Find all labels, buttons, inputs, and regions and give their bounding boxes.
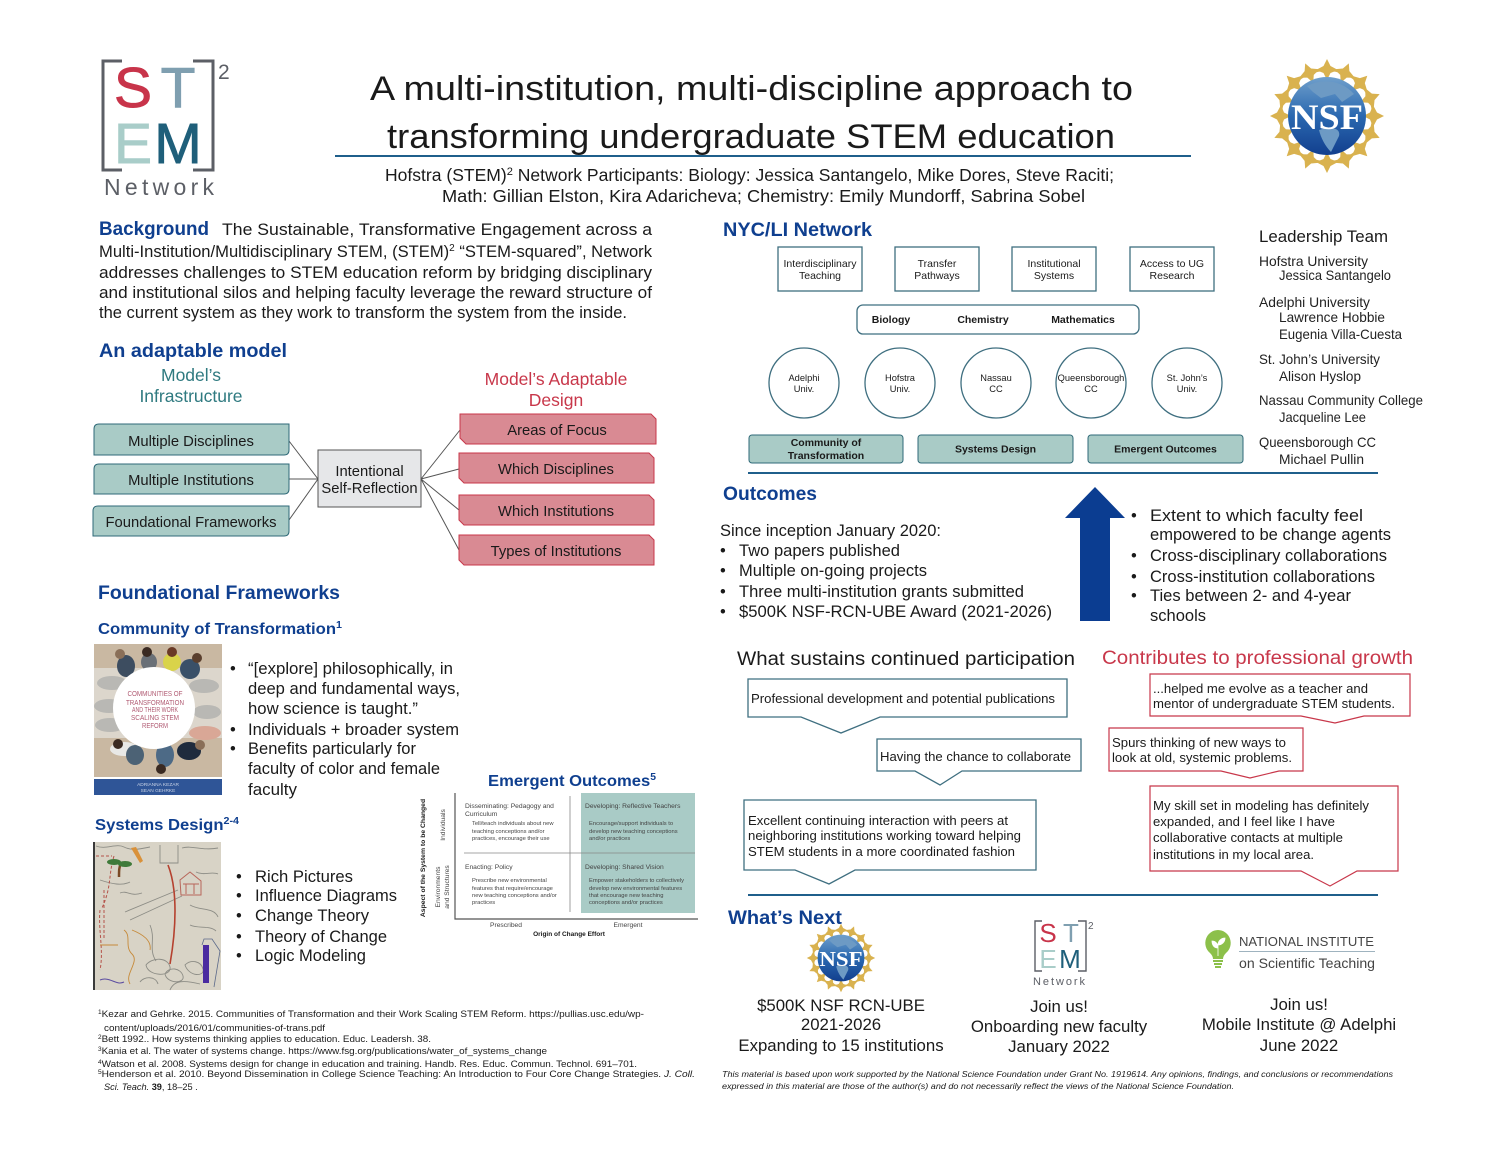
- diagram: NYC/LI network structure: Nassau: [980, 373, 1012, 383]
- callouts: professional growth quotes: collaborative contacts at multiple: [1153, 830, 1343, 845]
- image: book cover: COMMUNITIES OF: [128, 689, 183, 698]
- image: book cover: AND THEIR WORK: [132, 705, 178, 714]
- chart: emergent outcomes quadrant: Developing: Reflective Teachers: [585, 803, 681, 810]
- bullets: community of transformation: [230, 660, 460, 799]
- footnotes: Henderson et al. 2010. Beyond Dissemination in College Science Teaching: An Introduction to Four Core Change Strategies.: [102, 1069, 664, 1079]
- callouts: participation quotes: STEM students in a more coordinated fashion: [748, 844, 1015, 859]
- leadership team: Nassau Community College: [1259, 392, 1423, 408]
- callouts: participation quotes: neighboring institutions working toward helping: [748, 828, 1021, 843]
- diagram: NYC/LI network structure: Univ.: [890, 384, 910, 394]
- next: NSF award: $500K NSF RCN-UBE: [757, 996, 925, 1015]
- diagram: NYC/LI network structure: Interdisciplinary: [784, 258, 857, 270]
- bullets: systems design: [236, 868, 397, 965]
- diagram: adaptable model: Types of Institutions: [491, 544, 621, 560]
- heading: outcomes: Outcomes: [723, 484, 817, 505]
- heading: NYC/LI network: NYC/LI Network: [723, 220, 872, 241]
- footnotes: J. Coll.: [663, 1069, 695, 1079]
- leadership team: Lawrence Hobbie: [1279, 309, 1385, 325]
- long-term outcomes list: [1131, 507, 1391, 625]
- leadership team: Eugenia Villa-Cuesta: [1279, 326, 1402, 342]
- diagram: NYC/LI network structure: Queensborough: [1058, 373, 1124, 383]
- chart: emergent outcomes quadrant: Encourage/support individuals to: [589, 821, 673, 827]
- diagram: NYC/LI network structure: CC: [989, 384, 1003, 394]
- chart: emergent outcomes quadrant: Aspect of the System to be Changed: [420, 799, 427, 917]
- callouts: professional growth quotes: look at old, systemic problems.: [1112, 750, 1292, 765]
- heading: community of transformation: Community of Transformation: [98, 621, 319, 638]
- logo: National Institute on Scientific Teaching: [1205, 930, 1375, 971]
- diagram: adaptable model: Model’s: [161, 365, 221, 385]
- callouts: professional growth quotes: ...helped me evolve as a teacher and: [1153, 681, 1368, 696]
- leadership team: Hofstra University: [1259, 253, 1368, 269]
- diagram: NYC/LI network structure: Institutional: [1027, 258, 1081, 270]
- funding disclaimer: This material is based upon work supported by the National Science Foundation under Grant No. 1919614. Any opinions, findings, and conclusions or recommendations: [722, 1069, 1394, 1079]
- diagram: NYC/LI network structure: Teaching: [799, 270, 841, 282]
- chart: emergent outcomes quadrant: Curriculum: [465, 811, 498, 818]
- diagram: adaptable model: [93, 365, 656, 565]
- diagram: adaptable model: Multiple Institutions: [128, 473, 254, 489]
- authors: [385, 165, 1114, 206]
- diagram: adaptable model: Multiple Disciplines: [128, 434, 254, 450]
- diagram: adaptable model: Areas of Focus: [507, 423, 607, 439]
- diagram: NYC/LI network structure: Univ.: [1177, 384, 1197, 394]
- image: book cover: TRANSFORMATION: [126, 698, 184, 707]
- long-term outcomes list: •: [1131, 547, 1137, 565]
- background text: 2: [449, 243, 455, 254]
- callouts: professional growth quotes: My skill set in modeling has definitely: [1153, 798, 1369, 813]
- footnotes: 1: [98, 1010, 102, 1016]
- chart: emergent outcomes quadrant: Individuals: [440, 809, 447, 841]
- logo: STEM squared Network small: E: [1039, 944, 1057, 974]
- bullets: community of transformation: •: [230, 721, 236, 739]
- chart: emergent outcomes quadrant: Enacting: Policy: [465, 864, 513, 871]
- leadership team: St. John’s University: [1259, 351, 1380, 367]
- footnotes: Watson et al. 2008. Systems design for change in education and training. Handb. Res. Educ. Commun. Technol. 691–701.: [102, 1059, 637, 1069]
- callouts: professional growth quotes: institutions in my local area.: [1153, 847, 1314, 862]
- chart: emergent outcomes quadrant: Prescribe new environmental: [472, 878, 547, 884]
- diagram: adaptable model: Self-Reflection: [321, 481, 418, 497]
- next: mobile institute: Join us!: [1270, 995, 1328, 1014]
- chart: emergent outcomes quadrant: Environments: [435, 866, 442, 907]
- diagram: NYC/LI network structure: Access to UG: [1140, 258, 1204, 270]
- title: A multi-institution, multi-discipline approach to: [370, 70, 1133, 108]
- callouts: professional growth quotes: mentor of undergraduate STEM students.: [1153, 696, 1395, 711]
- image: rich picture sketch: [93, 842, 221, 990]
- chart: emergent outcomes quadrant: Tell/teach individuals about new: [472, 821, 554, 827]
- diagram: NYC/LI network structure: Mathematics: [1051, 314, 1115, 326]
- footnotes: 4: [98, 1060, 102, 1066]
- callouts: professional growth quotes: expanded, and I feel like I have: [1153, 814, 1335, 829]
- next: onboarding: Onboarding new faculty: [971, 1017, 1148, 1036]
- background text: and institutional silos and helping faculty leverage the reward structure of: [99, 284, 652, 302]
- outcomes list: •: [720, 583, 726, 601]
- logo: STEM squared Network: [103, 56, 230, 200]
- chart: emergent outcomes quadrant: features that require/encourage: [472, 886, 553, 892]
- diagram: NYC/LI network structure: Adelphi: [788, 373, 820, 383]
- authors: Hofstra (STEM): [385, 165, 506, 185]
- outcomes list: Three multi-institution grants submitted: [739, 583, 1024, 601]
- diagram: NYC/LI network structure: CC: [1084, 384, 1098, 394]
- chart: emergent outcomes quadrant: Disseminating: Pedagogy and: [465, 803, 554, 810]
- footnotes: Kania et al. The water of systems change. https://www.fsg.org/publications/water_of_systems_change: [102, 1046, 547, 1056]
- arrow: up: [1065, 487, 1125, 621]
- heading: an adaptable model: An adaptable model: [99, 341, 287, 362]
- heading: community of transformation: 1: [336, 620, 342, 631]
- chart: emergent outcomes quadrant: teaching conceptions and/or: [472, 829, 545, 835]
- logo: STEM squared Network: Network: [104, 174, 214, 200]
- next: mobile institute: June 2022: [1260, 1036, 1338, 1055]
- icon: NSF logo small: [807, 924, 875, 992]
- footnotes: Kezar and Gehrke. 2015. Communities of Transformation and their Work Scaling STEM Reform. https://pullias.usc.edu/wp-: [102, 1009, 644, 1019]
- authors: Math: Gillian Elston, Kira Adaricheva; Chemistry: Emily Mundorff, Sabrina Sobel: [442, 186, 1085, 206]
- next: mobile institute: [1202, 995, 1396, 1055]
- bullets: systems design: Influence Diagrams: [255, 887, 397, 905]
- diagram: adaptable model: Which Institutions: [498, 504, 614, 520]
- next: onboarding: [971, 997, 1148, 1056]
- diagram: adaptable model: Foundational Frameworks: [105, 515, 277, 531]
- icon: NSF logo: NSF: [1291, 97, 1363, 137]
- outcomes list: [720, 522, 1052, 621]
- chart: emergent outcomes quadrant: conceptions and/or practices: [589, 900, 663, 906]
- chart: emergent outcomes quadrant: Developing: Shared Vision: [585, 864, 664, 871]
- diagram: NYC/LI network structure: Pathways: [914, 270, 960, 282]
- callouts: participation quotes: Professional development and potential publications: [751, 691, 1056, 706]
- leadership team: Leadership Team: [1259, 228, 1388, 246]
- footnotes: 2: [98, 1035, 102, 1041]
- logo: STEM squared Network: E: [114, 112, 152, 176]
- image: book cover: SCALING STEM: [131, 713, 179, 722]
- diagram: NYC/LI network structure: Transfer: [918, 258, 957, 270]
- bullets: community of transformation: •: [230, 740, 236, 758]
- background text: The Sustainable, Transformative Engagement across a: [222, 221, 653, 239]
- logo: STEM squared Network small: S: [1039, 918, 1057, 948]
- chart: emergent outcomes quadrant: that encourage new teaching: [589, 893, 663, 899]
- long-term outcomes list: Cross-disciplinary collaborations: [1150, 547, 1387, 565]
- chart: emergent outcomes quadrant: Origin of Change Effort: [533, 931, 606, 938]
- logo: STEM squared Network small: 2: [1088, 921, 1094, 932]
- logo: National Institute on Scientific Teaching: NATIONAL INSTITUTE: [1239, 934, 1374, 949]
- heading: emergent outcomes: 5: [650, 772, 656, 783]
- next: NSF award: 2021-2026: [801, 1015, 881, 1034]
- footnotes: [98, 1009, 695, 1092]
- logo: STEM squared Network small: T: [1063, 918, 1079, 948]
- bullets: systems design: •: [236, 928, 242, 946]
- next: NSF award: [738, 996, 944, 1055]
- background text: “STEM-squared”, Network: [455, 243, 653, 261]
- diagram: adaptable model: Model’s Adaptable: [485, 369, 627, 389]
- leadership team: Alison Hyslop: [1279, 368, 1361, 384]
- heading: foundational frameworks: Foundational Frameworks: [98, 583, 340, 604]
- logo: STEM squared Network: M: [154, 112, 202, 176]
- diagram: NYC/LI network structure: Hofstra: [885, 373, 916, 383]
- chart: emergent outcomes quadrant: and/or practices: [589, 836, 630, 842]
- heading: systems design: Systems Design: [95, 817, 215, 834]
- next: mobile institute: Mobile Institute @ Adelphi: [1202, 1015, 1396, 1034]
- logo: STEM squared Network small: M: [1059, 944, 1081, 974]
- bullets: systems design: Logic Modeling: [255, 947, 366, 965]
- long-term outcomes list: •: [1131, 507, 1137, 525]
- footnotes: Sci. Teach. 39, 18–25 .: [104, 1082, 198, 1092]
- diagram: NYC/LI network structure: St. John’s: [1167, 373, 1208, 383]
- bullets: systems design: Rich Pictures: [255, 868, 353, 886]
- bullets: systems design: Theory of Change: [255, 928, 387, 946]
- leadership team: Jessica Santangelo: [1279, 267, 1391, 283]
- chart: emergent outcomes quadrant: practices, encourage their use: [472, 836, 550, 842]
- next: onboarding: Join us!: [1030, 997, 1088, 1016]
- diagram: adaptable model: Intentional: [335, 464, 404, 480]
- title: [335, 70, 1191, 157]
- image: book cover: [94, 644, 222, 795]
- background text: addresses challenges to STEM education reform by bridging disciplinary: [99, 264, 653, 282]
- image: book cover: REFORM: [142, 721, 168, 730]
- bullets: systems design: •: [236, 887, 242, 905]
- bullets: community of transformation: •: [230, 660, 236, 678]
- callouts: participation quotes: Excellent continuing interaction with peers at: [748, 813, 1008, 828]
- bullets: systems design: •: [236, 907, 242, 925]
- bullets: systems design: •: [236, 868, 242, 886]
- logo: STEM squared Network small: [1033, 918, 1094, 988]
- footnotes: content/uploads/2016/01/communities-of-trans.pdf: [104, 1023, 325, 1033]
- funding disclaimer: expressed in this material are those of the author(s) and do not necessarily reflect the views of the National Science Foundation.: [722, 1081, 1234, 1091]
- outcomes list: Two papers published: [739, 542, 900, 560]
- bullets: community of transformation: Benefits particularly for: [248, 740, 416, 758]
- callouts: participation quotes: [744, 679, 1081, 884]
- background text: [99, 219, 653, 322]
- long-term outcomes list: Cross-institution collaborations: [1150, 568, 1375, 586]
- heading: emergent outcomes: Emergent Outcomes: [488, 773, 644, 790]
- chart: emergent outcomes quadrant: new teaching conceptions and/or: [472, 893, 557, 899]
- long-term outcomes list: •: [1131, 587, 1137, 605]
- logo: STEM squared Network: T: [161, 56, 195, 120]
- diagram: adaptable model: Infrastructure: [139, 386, 243, 406]
- long-term outcomes list: empowered to be change agents: [1150, 526, 1391, 544]
- next: NSF award: Expanding to 15 institutions: [738, 1036, 944, 1055]
- title: transforming undergraduate STEM education: [387, 118, 1115, 156]
- chart: emergent outcomes quadrant: Empower stakeholders to collectively: [589, 878, 684, 884]
- outcomes list: •: [720, 562, 726, 580]
- diagram: adaptable model: Design: [529, 390, 583, 410]
- heading: contributes to professional growth: Contributes to professional growth: [1102, 648, 1413, 669]
- chart: emergent outcomes quadrant: develop new environmental features: [589, 886, 682, 892]
- callouts: participation quotes: Having the chance to collaborate: [880, 749, 1071, 764]
- logo: STEM squared Network small: Network: [1033, 976, 1086, 988]
- logo: STEM squared Network: 2: [218, 61, 230, 84]
- long-term outcomes list: Extent to which faculty feel: [1150, 507, 1363, 525]
- bullets: community of transformation: faculty of color and female: [248, 760, 440, 778]
- long-term outcomes list: Ties between 2- and 4-year: [1150, 587, 1352, 605]
- bullets: community of transformation: “[explore] philosophically, in: [248, 660, 453, 678]
- funding disclaimer: [722, 1069, 1394, 1091]
- bullets: community of transformation: Individuals + broader system: [248, 721, 459, 739]
- outcomes list: $500K NSF-RCN-UBE Award (2021-2026): [739, 603, 1052, 621]
- diagram: NYC/LI network structure: Chemistry: [957, 314, 1009, 326]
- diagram: NYC/LI network structure: Systems: [1034, 270, 1074, 282]
- leadership team: Adelphi University: [1259, 294, 1370, 310]
- next: onboarding: January 2022: [1008, 1037, 1110, 1056]
- outcomes list: Since inception January 2020:: [720, 522, 941, 540]
- diagram: NYC/LI network structure: Research: [1150, 270, 1195, 282]
- diagram: NYC/LI network structure: Univ.: [794, 384, 814, 394]
- callouts: professional growth quotes: Spurs thinking of new ways to: [1112, 735, 1286, 750]
- outcomes list: Multiple on-going projects: [739, 562, 927, 580]
- chart: emergent outcomes quadrant: practices: [472, 900, 495, 906]
- chart: emergent outcomes quadrant: Emergent: [614, 922, 643, 929]
- leadership team: Queensborough CC: [1259, 434, 1376, 450]
- diagram: NYC/LI network structure: Community of: [791, 437, 862, 449]
- long-term outcomes list: •: [1131, 568, 1137, 586]
- bullets: systems design: Change Theory: [255, 907, 370, 925]
- image: book cover: SEAN GEHRKE: [141, 788, 175, 794]
- background text: Multi-Institution/Multidisciplinary STEM, (STEM): [99, 243, 447, 261]
- authors: 2: [507, 166, 513, 178]
- bullets: community of transformation: faculty: [248, 781, 298, 799]
- footnotes: Bett 1992.. How systems thinking applies to education. Educ. Leadersh. 38.: [102, 1034, 431, 1044]
- callouts: professional growth quotes: [1109, 674, 1410, 886]
- chart: emergent outcomes quadrant: Prescribed: [490, 922, 522, 929]
- diagram: NYC/LI network structure: Emergent Outcomes: [1114, 444, 1217, 456]
- background text: Background: [99, 219, 209, 240]
- diagram: NYC/LI network structure: Biology: [872, 314, 910, 326]
- logo: National Institute on Scientific Teaching: on Scientific Teaching: [1239, 955, 1375, 971]
- heading: what's next: What’s Next: [728, 908, 843, 929]
- footnotes: 5: [98, 1070, 102, 1076]
- bullets: community of transformation: deep and fundamental ways,: [248, 680, 460, 698]
- leadership team: Jacqueline Lee: [1279, 409, 1366, 425]
- outcomes list: •: [720, 603, 726, 621]
- heading: what sustains continued participation: What sustains continued participation: [737, 649, 1075, 670]
- logo: STEM squared Network: S: [114, 56, 152, 120]
- bullets: community of transformation: how science is taught.”: [248, 700, 418, 718]
- diagram: adaptable model: Which Disciplines: [498, 462, 614, 478]
- authors: Network Participants: Biology: Jessica Santangelo, Mike Dores, Steve Raciti;: [513, 165, 1114, 185]
- long-term outcomes list: schools: [1150, 607, 1206, 625]
- chart: emergent outcomes quadrant: [420, 793, 698, 938]
- diagram: NYC/LI network structure: [748, 247, 1378, 474]
- leadership team: Michael Pullin: [1279, 451, 1364, 467]
- image: book cover: ADRIANNA KEZAR: [137, 782, 179, 788]
- background text: the current system as they work to transform the system from the inside.: [99, 304, 627, 322]
- icon: NSF logo: [1270, 59, 1384, 173]
- leadership team: [1259, 228, 1423, 467]
- icon: NSF logo small: NSF: [819, 947, 863, 971]
- outcomes list: •: [720, 542, 726, 560]
- diagram: NYC/LI network structure: Transformation: [788, 450, 864, 462]
- heading: systems design: 2-4: [223, 816, 239, 827]
- diagram: NYC/LI network structure: Systems Design: [955, 444, 1036, 456]
- chart: emergent outcomes quadrant: develop new teaching conceptions: [589, 829, 678, 835]
- bullets: systems design: •: [236, 947, 242, 965]
- footnotes: 3: [98, 1047, 102, 1053]
- chart: emergent outcomes quadrant: and Structures: [444, 865, 451, 909]
